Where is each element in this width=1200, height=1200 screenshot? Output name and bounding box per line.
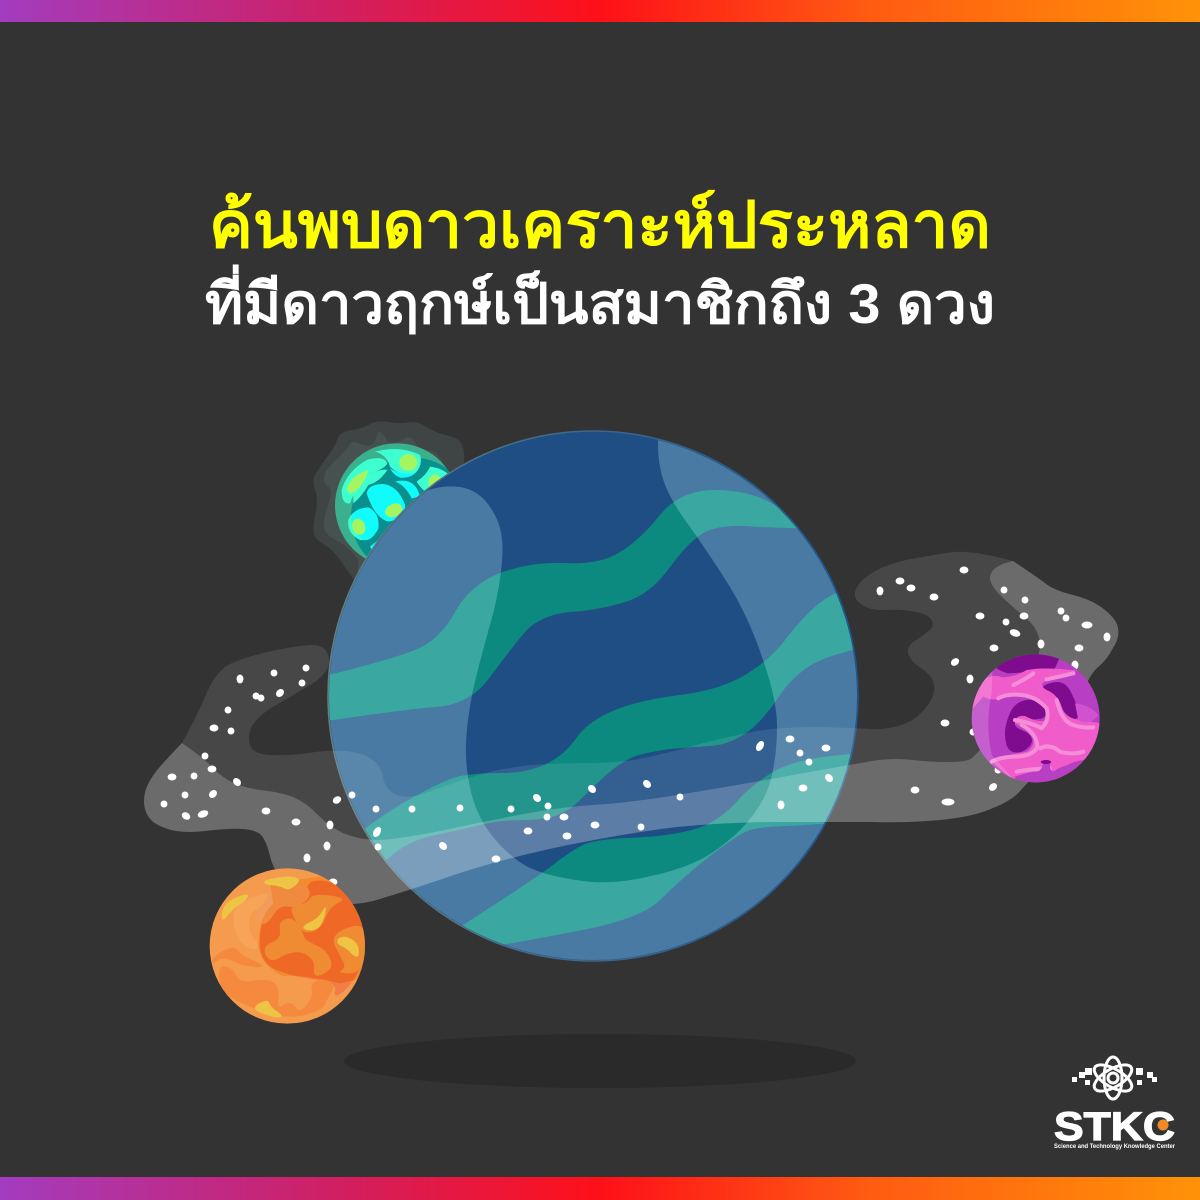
dark purple top	[996, 654, 1059, 674]
pale left crescent	[972, 672, 1012, 778]
ground shadow	[344, 1034, 856, 1088]
mid orange swirls	[291, 895, 342, 933]
title line 1: ค้นพบดาวเคราะห์ประหลาด	[209, 189, 991, 261]
yellow-green spots	[347, 470, 368, 493]
big blue planet	[327, 430, 859, 962]
dark teal core	[351, 458, 450, 556]
cloud dark part	[182, 552, 1040, 840]
orange planet	[210, 868, 365, 1024]
logo wordmark: STKC	[1054, 1105, 1175, 1149]
halo inner	[324, 432, 444, 574]
lighter crescent overlay	[329, 440, 857, 960]
logo tagline: Science and Technology Knowledge Center	[1054, 1144, 1176, 1150]
cloud light part	[144, 561, 1118, 904]
yellow patches	[264, 877, 299, 889]
deep orange swirl	[260, 881, 365, 996]
planet disc	[335, 443, 459, 567]
medium orange blobs	[212, 948, 262, 967]
pale strands	[992, 673, 1093, 772]
bottom gradient bar	[0, 1177, 1200, 1200]
star particles	[161, 567, 1110, 885]
teal band lower	[463, 752, 870, 950]
teal band middle	[365, 593, 853, 860]
bright pink flow	[970, 668, 1102, 783]
mint cells	[342, 458, 387, 503]
cyan cells	[367, 484, 405, 522]
green planet with halo	[313, 421, 472, 587]
halo outer	[313, 421, 464, 587]
soft pink patch	[1075, 703, 1098, 722]
teal band upper	[329, 490, 797, 720]
dark purple centre	[1005, 700, 1046, 752]
magenta disc	[972, 654, 1100, 782]
data squares	[1072, 1068, 1157, 1085]
dark purple notch	[1041, 760, 1051, 764]
pale lower-left overlay	[210, 868, 358, 1024]
orange disc	[210, 868, 365, 1024]
lower magenta wave	[1015, 763, 1080, 782]
pink planet	[972, 654, 1100, 782]
gas cloud band	[144, 552, 1118, 904]
STKC logo	[1054, 1057, 1176, 1150]
orange dot	[1158, 1120, 1168, 1130]
dark purple right streak	[1043, 682, 1079, 719]
title line 2: ที่มีดาวฤกษ์เป็นสมาชิกถึง 3 ดวง	[205, 264, 995, 335]
planet base	[328, 431, 858, 961]
top gradient bar	[0, 0, 1200, 22]
atom icon	[1090, 1057, 1136, 1099]
